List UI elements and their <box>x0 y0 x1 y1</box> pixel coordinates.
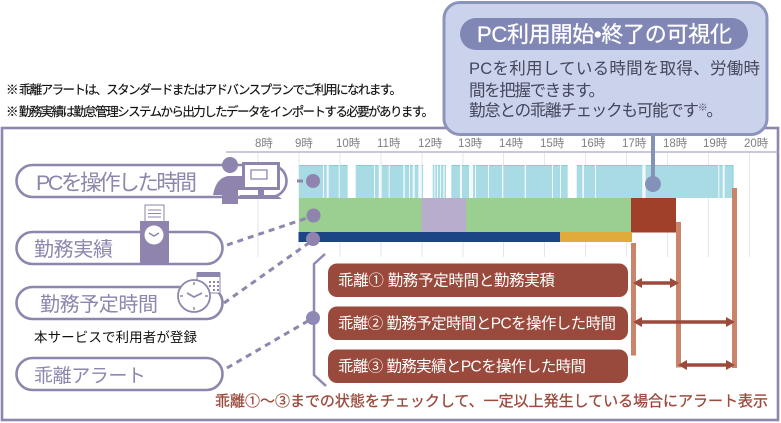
hour labels: 20時 <box>744 137 769 150</box>
pill: PC operating time: PCを操作した時間 <box>36 171 197 195</box>
deviation markers <box>631 188 737 368</box>
registration note: 本サービスで利用者が登録 <box>34 330 198 345</box>
notes: ※ 乖離アラートは、スタンダードまたはアドバンスプランでご利用になれます。 <box>6 82 402 97</box>
deviation arrows <box>633 278 735 370</box>
icon: clock and calendar <box>178 272 220 312</box>
deviation boxes: 乖離② 勤務予定時間とPCを操作した時間 <box>338 314 616 332</box>
bracket <box>306 254 326 386</box>
hour labels: 8時 <box>255 137 273 150</box>
deviation boxes: 乖離① 勤務予定時間と勤務実積 <box>338 272 555 290</box>
hour labels: 17時 <box>622 137 647 150</box>
bar: PC operating time <box>299 165 733 198</box>
hour labels: 11時 <box>377 137 401 150</box>
notes <box>6 82 434 119</box>
hour labels: 10時 <box>336 137 361 150</box>
deviation boxes <box>328 264 628 383</box>
hour labels: 12時 <box>418 137 443 150</box>
hour labels: 14時 <box>499 137 524 150</box>
connectors <box>224 181 313 368</box>
pill: scheduled time <box>16 287 222 319</box>
bar: attendance record <box>299 198 676 232</box>
alert caption: 乖離①～③までの状態をチェックして、一定以上発生している場合にアラート表示 <box>215 393 768 410</box>
callout body: 間を把握できます。 <box>469 81 605 100</box>
callout body <box>469 59 760 120</box>
deviation boxes: 乖離③ 勤務実績とPCを操作した時間 <box>338 358 586 376</box>
callout connector <box>645 133 661 192</box>
hour labels: 18時 <box>663 137 688 150</box>
icon: punch clock <box>140 205 169 265</box>
callout body: 。 <box>706 102 723 120</box>
hour labels: 19時 <box>703 137 728 150</box>
hour labels: 15時 <box>540 137 565 150</box>
hour labels <box>255 137 769 150</box>
hour labels: 9時 <box>295 137 313 150</box>
timeline grid <box>226 152 778 257</box>
callout body: ※ <box>698 103 708 114</box>
hour labels: 16時 <box>581 137 606 150</box>
callout body: PCを利用している時間を取得、労働時 <box>469 59 760 78</box>
pill: attendance record: 勤務実績 <box>34 238 113 261</box>
callout panel <box>444 2 767 134</box>
pill: scheduled time: 勤務予定時間 <box>40 293 158 316</box>
connector dots <box>306 174 320 246</box>
callout body: 勤怠との乖離チェックも可能です <box>469 102 699 120</box>
hour labels: 13時 <box>458 137 483 150</box>
callout title: PC利用開始•終了の可視化 <box>477 22 732 47</box>
pill: deviation alert: 乖離アラート <box>34 365 146 387</box>
callout title <box>460 18 748 50</box>
pill: attendance record <box>16 232 222 264</box>
main frame <box>2 128 778 420</box>
pill: deviation alert <box>16 358 222 390</box>
pill: PC operating time <box>16 165 286 197</box>
icon: person at PC <box>213 157 282 204</box>
bar: scheduled time <box>298 232 632 242</box>
notes: ※ 勤務実績は勤怠管理システムから出力したデータをインポートする必要があります。 <box>6 104 434 119</box>
